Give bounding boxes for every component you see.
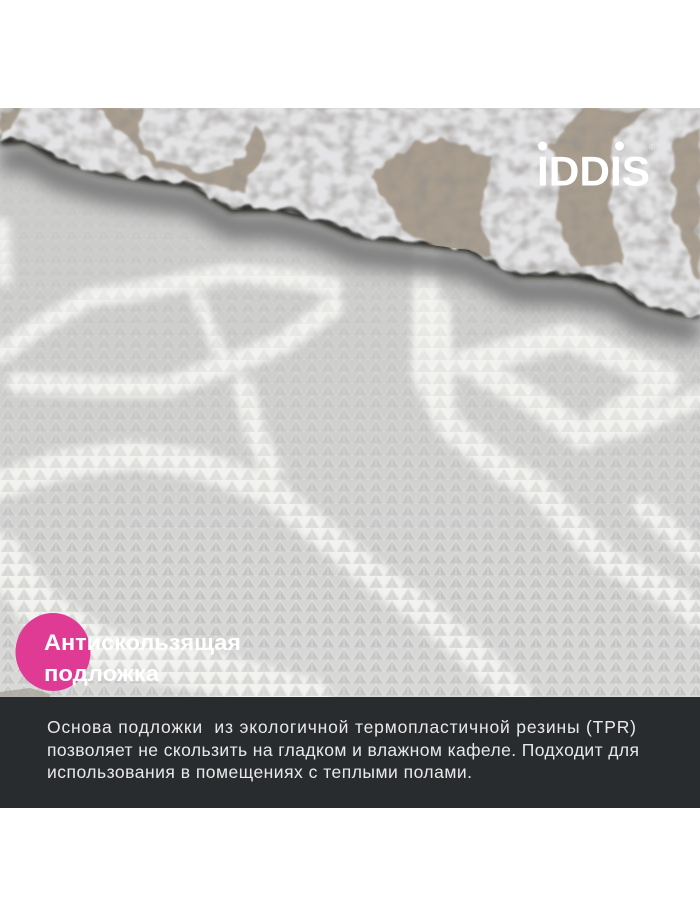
product photo: rug underside and pile [0, 108, 700, 700]
logo: IDDIS: ® [649, 143, 655, 152]
description text: Основа подложки из экологичной термопластичной резины (TPR) [47, 717, 636, 737]
pink accent circle [16, 613, 90, 691]
heading: Антискользящая [44, 630, 241, 655]
pile curls [0, 108, 700, 318]
shadow under the pile [0, 158, 700, 333]
logo: IDDIS: IDDIS [537, 148, 650, 194]
rubber backing base [0, 108, 700, 697]
brown pile patches [0, 108, 700, 280]
description text: использования в помещениях с теплыми полами. [47, 762, 472, 782]
heading: подложка [44, 661, 160, 686]
rug pile [0, 108, 700, 318]
dark description panel [0, 697, 700, 808]
heading [44, 630, 241, 686]
backing pattern: cream bands [0, 225, 700, 700]
backing grid texture [0, 248, 700, 697]
description text [47, 717, 639, 782]
description text: позволяет не скользить на гладком и влажном кафеле. Подходит для [47, 740, 639, 760]
bottom left corner fringe [0, 688, 50, 697]
